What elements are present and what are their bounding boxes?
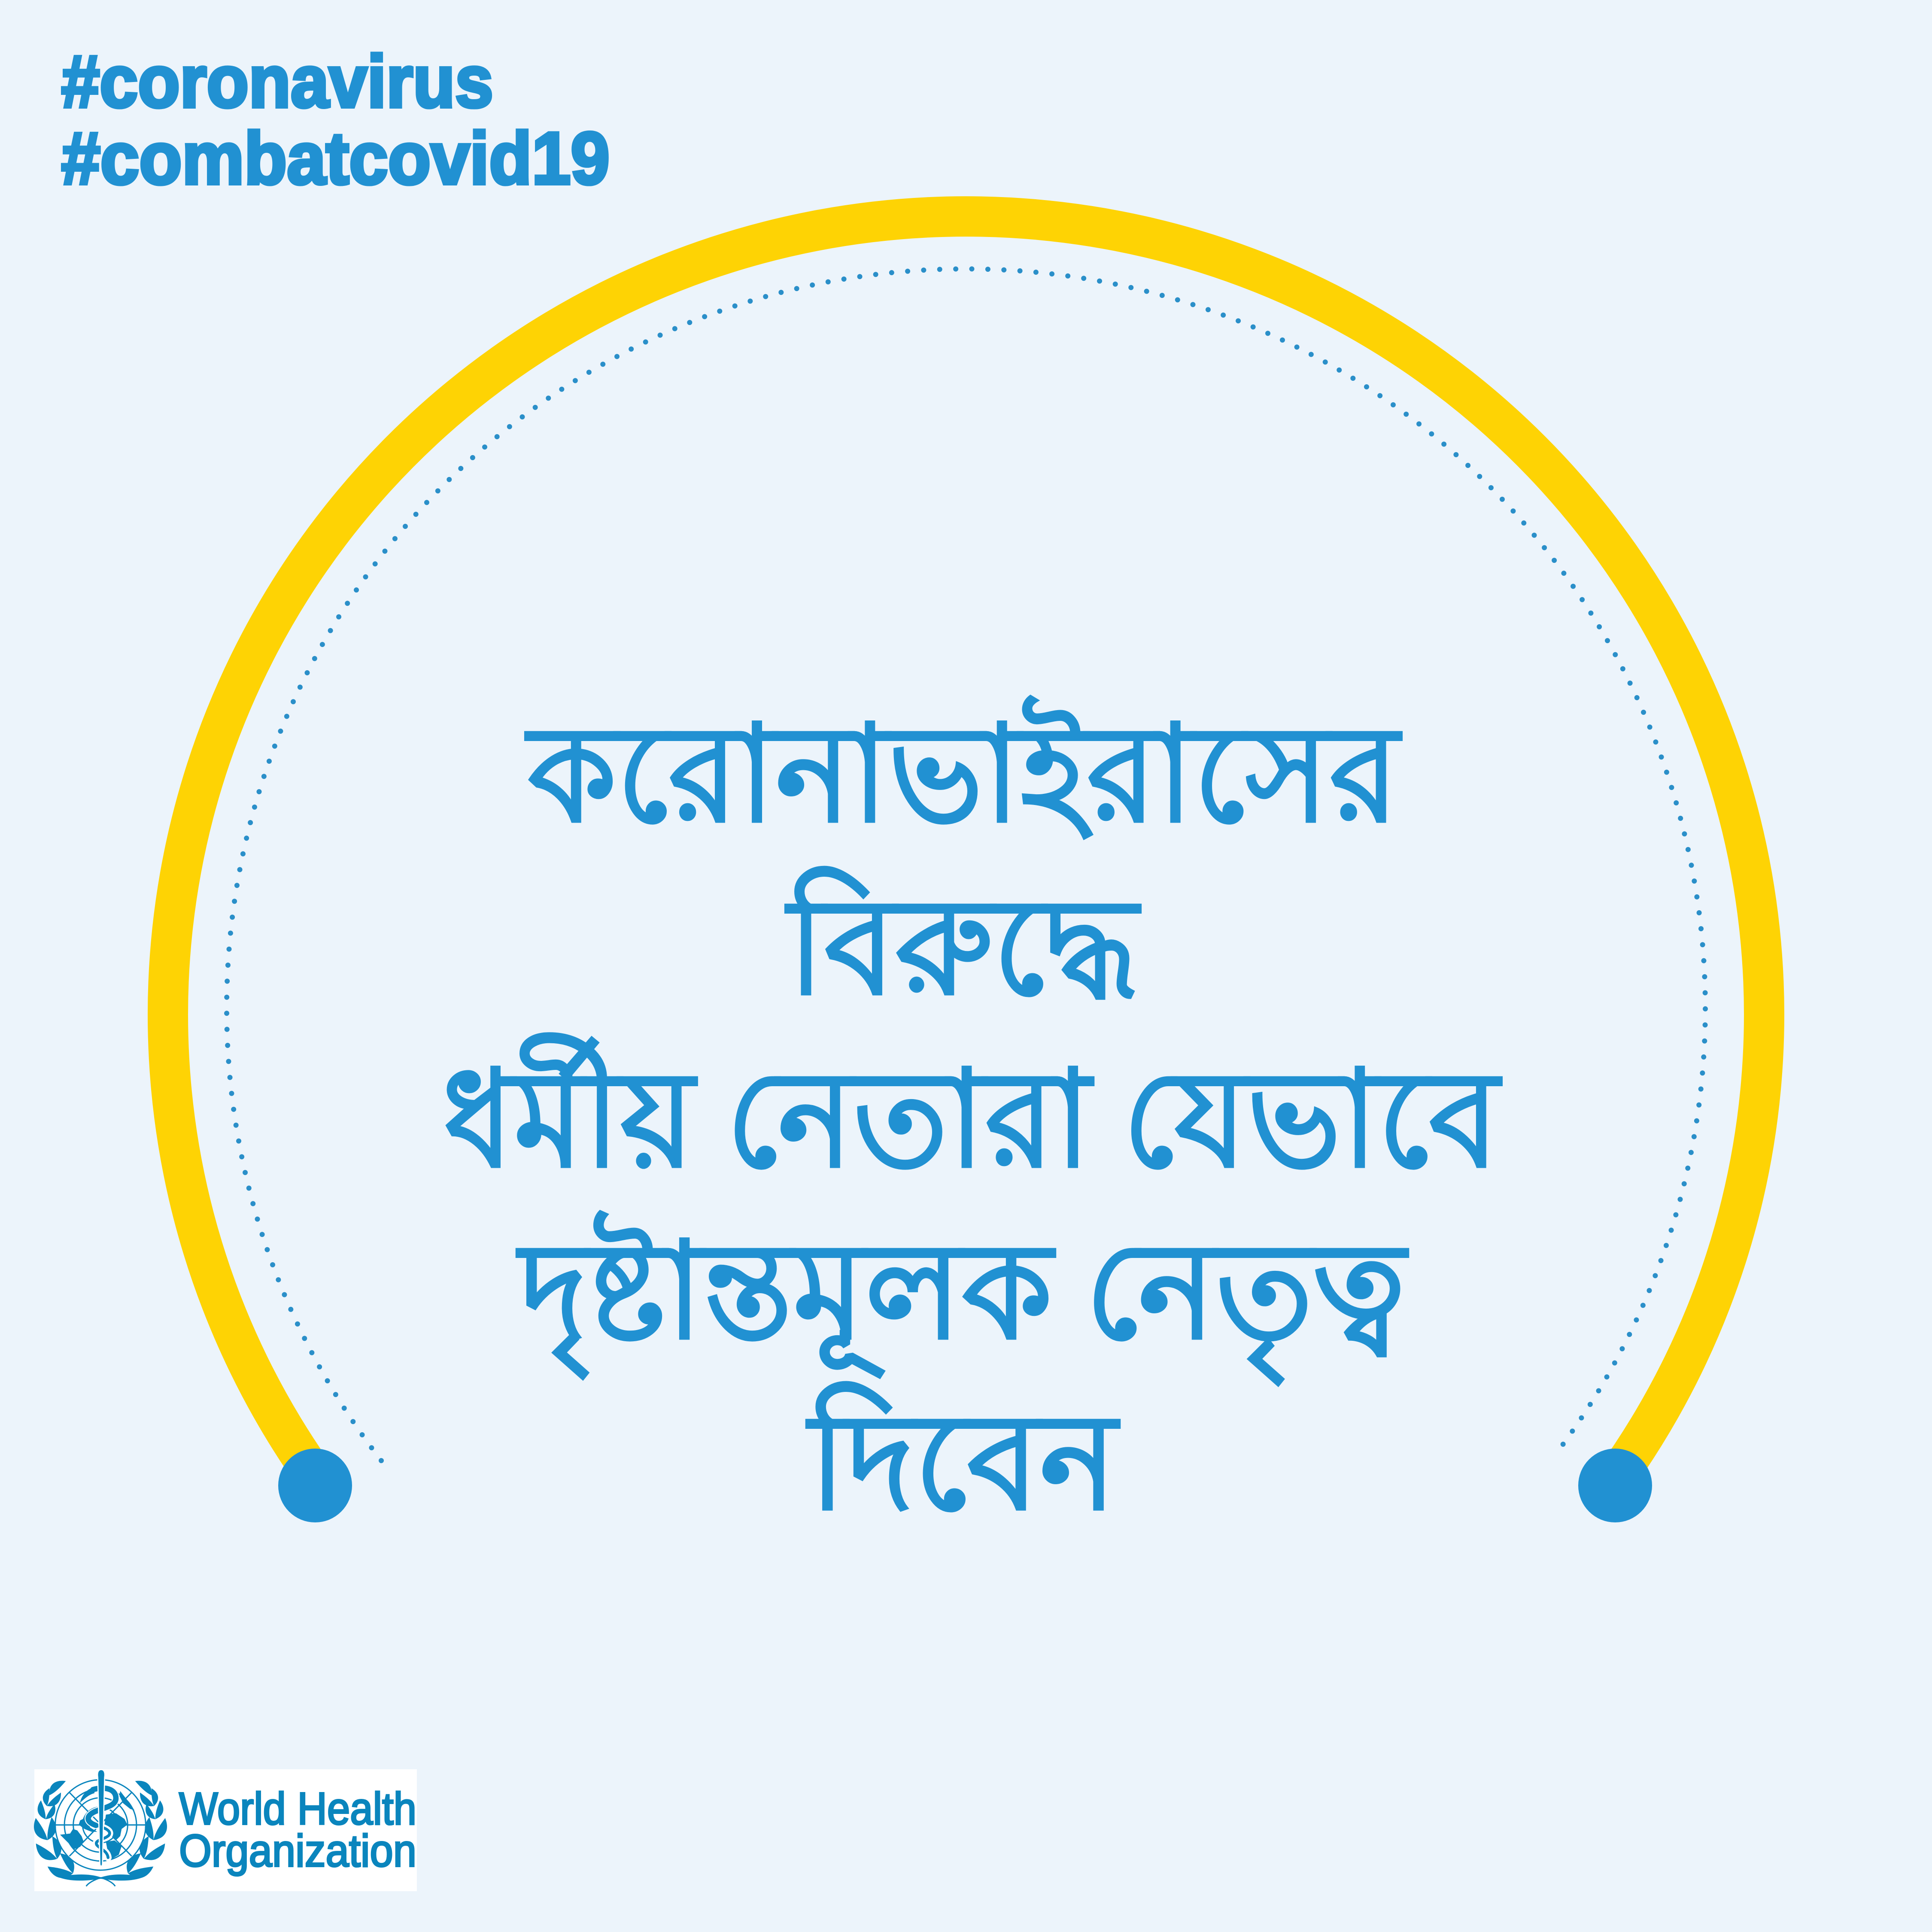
logo background [34, 1769, 417, 1891]
hashtag: combatcovid19: #combatcovid19 [61, 117, 610, 200]
laurel left [29, 1776, 79, 1881]
dotted arc [227, 269, 1705, 1461]
heading line 5: দিবেন [807, 1382, 1121, 1538]
wordmark line 2: Organization [179, 1826, 416, 1876]
laurel right [122, 1776, 172, 1881]
heading line 3: ধর্মীয় নেতারা যেভাবে [443, 1033, 1502, 1196]
main heading [443, 696, 1502, 1538]
yellow arc [168, 216, 1764, 1482]
heading line 1: করোনাভাইরাসের [526, 696, 1403, 851]
right end dot [1578, 1449, 1652, 1522]
hashtag: coronavirus: #coronavirus [61, 40, 493, 123]
heading line 4: দৃষ্টান্তমূলক নেতৃত্ব [517, 1211, 1409, 1385]
ribbon [57, 1874, 145, 1886]
hashtags [61, 40, 610, 200]
WHO emblem [29, 1770, 172, 1886]
serpent head [80, 1787, 94, 1803]
heading line 2: বিরুদ্ধে [786, 867, 1140, 1023]
staff [97, 1770, 105, 1867]
WHO wordmark [179, 1783, 416, 1876]
wordmark line 1: World Health [179, 1783, 416, 1834]
left end dot [278, 1449, 352, 1522]
globe grid [55, 1780, 146, 1870]
serpent [88, 1788, 116, 1858]
continents [60, 1791, 134, 1859]
WHO logo [29, 1769, 417, 1891]
